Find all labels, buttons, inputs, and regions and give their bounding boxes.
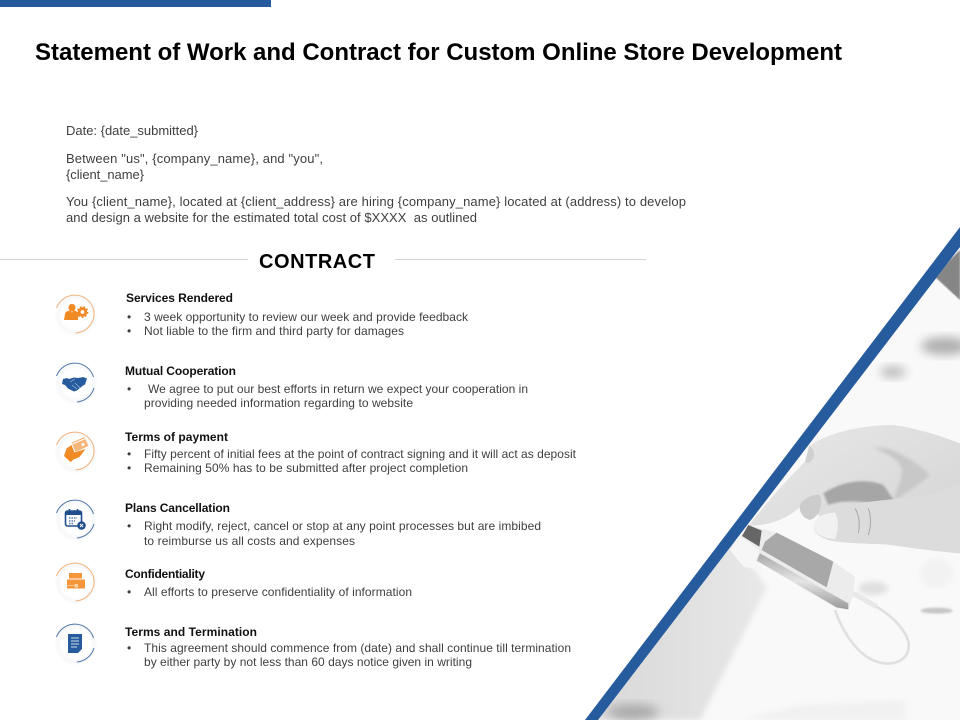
icon: orange printer with lock [56,563,94,601]
item: terms and termination: Terms and Termination [125,625,257,639]
top accent bar [0,0,271,7]
item: services rendered: • [127,310,131,324]
item: mutual cooperation: providing needed information regarding to website [144,396,413,410]
item: plans cancellation: • [127,519,131,533]
intro text block: {client_name} [66,167,145,182]
item: services rendered [56,291,469,338]
item: terms and termination: • [127,641,131,655]
intro text block [66,123,686,225]
item: mutual cooperation [56,363,528,410]
item: terms and termination [56,624,571,669]
intro text block: and design a website for the estimated total cost of $XXXX as outlined [66,210,477,225]
item: plans cancellation: Plans Cancellation [125,501,230,515]
item: terms of payment: • [127,461,131,475]
contract heading with rules: CONTRACT [259,251,375,273]
item: terms of payment: Fifty percent of initial fees at the point of contract signing and it will act as deposit [144,447,577,461]
item: services rendered: Not liable to the firm and third party for damages [144,324,404,338]
diagonal blue band [585,227,960,720]
intro text block: You {client_name}, located at {client_address} are hiring {company_name} located at (address) to develop [66,194,686,209]
item: plans cancellation: to reimburse us all costs and expenses [144,534,355,548]
intro text block: Date: {date_submitted} [66,123,199,138]
icon: handshake [56,363,94,402]
item: terms of payment: • [127,447,131,461]
hand [749,425,960,553]
item: confidentiality: Confidentiality [125,567,205,581]
icon: calendar with cross [56,500,94,538]
item: confidentiality: All efforts to preserve confidentiality of information [144,585,412,599]
item: mutual cooperation: We agree to put our best efforts in return we expect your cooperation in [148,382,528,396]
cable [835,595,909,664]
item: mutual cooperation: • [127,382,131,396]
item: terms and termination: This agreement should commence from (date) and shall continue till termination [144,641,571,655]
intro text block: Between "us", {company_name}, and "you", [66,151,323,166]
item: confidentiality: • [127,585,131,599]
item: services rendered: • [127,324,131,338]
item: plans cancellation [56,500,541,548]
icon: hand with card [56,432,94,470]
title: Statement of Work and Contract for Custom Online Store Development [35,39,842,66]
item: plans cancellation: Right modify, reject, cancel or stop at any point processes but are imbibed [144,519,541,533]
icon: person with gear [56,295,94,333]
item: services rendered: 3 week opportunity to review our week and provide feedback [144,310,469,324]
item: terms of payment: Remaining 50% has to be submitted after project completion [144,461,468,475]
icon: document [56,624,94,662]
item: terms of payment [56,430,577,475]
item: mutual cooperation: Mutual Cooperation [125,364,236,378]
item: confidentiality [56,563,412,601]
item: services rendered: Services Rendered [126,291,233,305]
phone [730,525,855,609]
item: terms and termination: by either party by not less than 60 days notice given in writing [144,655,472,669]
item: terms of payment: Terms of payment [125,430,228,444]
photo: hand touching phone, grayscale, diagonal crop [598,250,960,720]
